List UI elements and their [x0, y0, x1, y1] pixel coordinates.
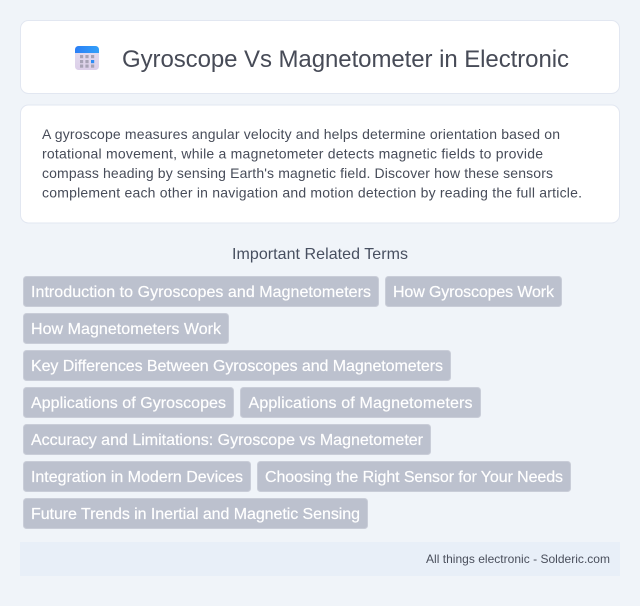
- tag: applications of gyroscopes: Applications of Gyroscopes: [31, 395, 226, 412]
- tag: introduction: Introduction to Gyroscopes and Magnetometers: [31, 284, 371, 301]
- description text: rotational movement, while a magnetometer detects magnetic fields to provide: [42, 146, 543, 162]
- tag: applications of gyroscopes: [24, 388, 234, 418]
- header panel: [20, 20, 620, 94]
- description text: A gyroscope measures angular velocity and helps determine orientation based on: [42, 126, 560, 142]
- tag: accuracy and limitations: [24, 424, 430, 454]
- description text: complement each other in navigation and motion detection by reading the full article.: [42, 184, 582, 200]
- tag: applications of magnetometers: Applications of Magnetometers: [248, 395, 472, 412]
- tag: how magnetometers work: How Magnetometers Work: [31, 321, 222, 338]
- footer credit: All things electronic - Solderic.com: [426, 552, 610, 566]
- tag: future trends: Future Trends in Inertial and Magnetic Sensing: [31, 506, 360, 523]
- footer bar: [20, 542, 620, 576]
- tag: integration in modern devices: [24, 462, 250, 492]
- icon: calendar grid: [75, 46, 99, 70]
- tag: key differences: Key Differences Between Gyroscopes and Magnetometers: [31, 358, 443, 375]
- tag: applications of magnetometers: [240, 388, 480, 418]
- tag: how gyroscopes work: How Gyroscopes Work: [393, 284, 555, 301]
- tag: choosing the right sensor: Choosing the Right Sensor for Your Needs: [265, 469, 563, 486]
- tag: choosing the right sensor: [258, 462, 570, 492]
- title: Gyroscope Vs Magnetometer in Electronic: [122, 46, 569, 73]
- tags group: [24, 276, 570, 528]
- tag: introduction: [24, 276, 378, 306]
- tag: how gyroscopes work: [386, 276, 562, 306]
- tag: future trends: [24, 498, 368, 528]
- heading: important related terms: Important Related Terms: [232, 246, 408, 263]
- tag: how magnetometers work: [24, 314, 228, 344]
- description text: compass heading by sensing Earth's magnetic field. Discover how these sensors: [42, 165, 553, 181]
- tag: integration in modern devices: Integration in Modern Devices: [31, 469, 243, 486]
- tag: accuracy and limitations: Accuracy and Limitations: Gyroscope vs Magnetometer: [31, 432, 424, 449]
- tag: key differences: [24, 350, 450, 380]
- description text: [42, 126, 582, 200]
- panel: description: [20, 105, 620, 223]
